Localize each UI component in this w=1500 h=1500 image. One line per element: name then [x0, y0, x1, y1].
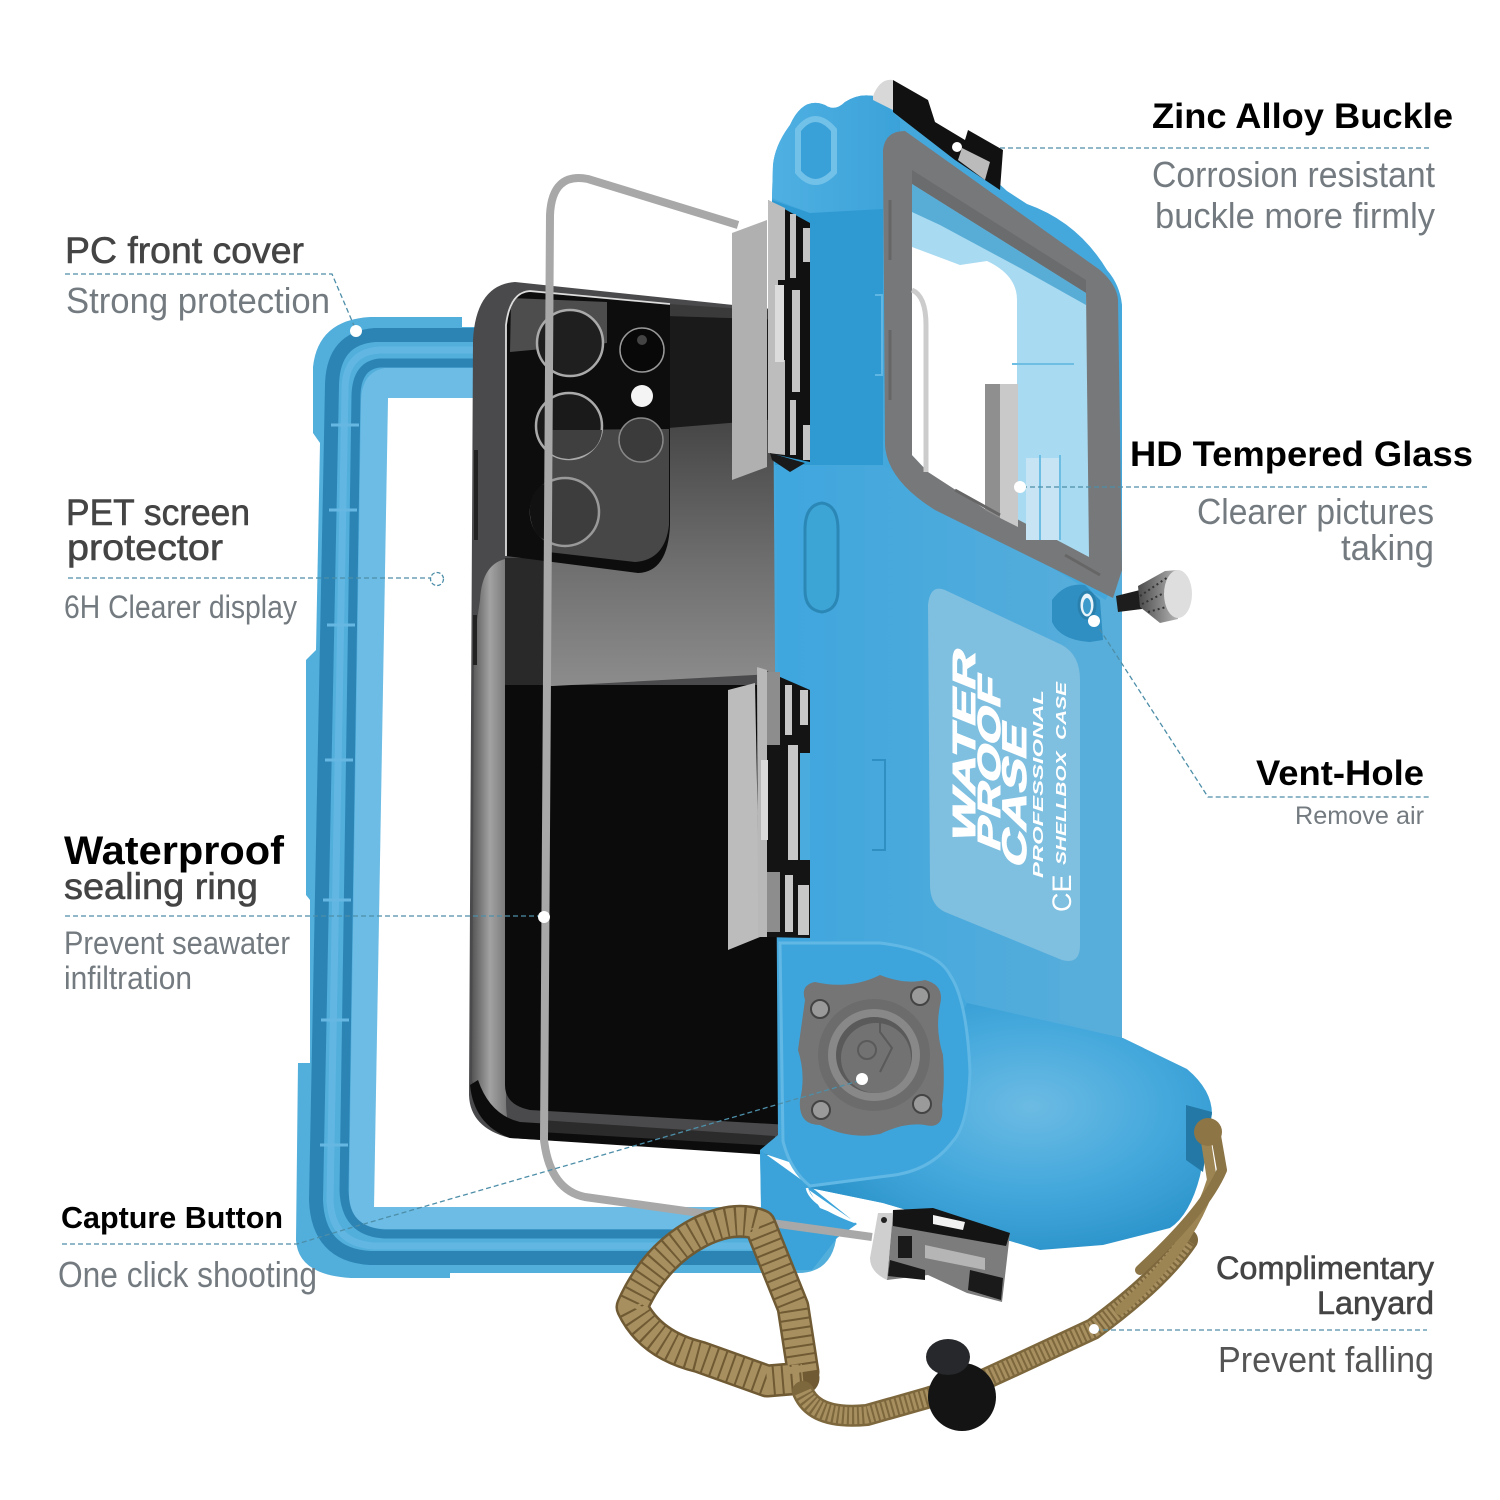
cord lock bead — [926, 1339, 996, 1431]
grip — [810, 1003, 1212, 1250]
callout: Zinc Alloy Buckle — [952, 97, 1453, 236]
callout: Zinc Alloy Buckle: Corrosion resistant — [1152, 154, 1435, 195]
callout: HD Tempered Glass: taking — [1341, 527, 1434, 568]
callout: Zinc Alloy Buckle: Zinc Alloy Buckle — [1152, 97, 1453, 136]
callout: Vent-Hole: Vent-Hole — [1256, 754, 1424, 793]
logo panel: CASE — [996, 715, 1034, 873]
zinc alloy top buckle — [873, 80, 1003, 190]
tempered glass window — [912, 184, 1089, 557]
panel: PC front cover frame — [296, 317, 836, 1278]
viewing window gasket — [883, 131, 1122, 598]
top section — [772, 95, 900, 213]
callout: PC front cover — [65, 230, 362, 337]
callout: PC front cover: PC front cover — [65, 230, 304, 271]
logo panel: PROOF — [972, 669, 1008, 856]
case body — [760, 95, 1212, 1270]
top slot — [798, 119, 834, 182]
callout: PC front cover: Strong protection — [66, 280, 330, 321]
logo panel: CE — [1047, 874, 1077, 912]
long slot — [805, 503, 838, 612]
callout: HD Tempered Glass: HD Tempered Glass — [1130, 435, 1473, 474]
callout: Complimentary Lanyard — [1089, 1250, 1434, 1380]
callout: Waterproof sealing ring: sealing ring — [64, 866, 258, 907]
vent hole with thumb screw — [1052, 570, 1192, 642]
callout: HD Tempered Glass — [1014, 435, 1473, 568]
button recess — [780, 943, 970, 1186]
waterproof sealing ring — [544, 178, 872, 1237]
callout: Waterproof sealing ring — [64, 829, 550, 996]
bottom buckle — [870, 1208, 1010, 1302]
callout: Waterproof sealing ring: Prevent seawater — [64, 925, 290, 961]
camera island — [506, 291, 670, 573]
logo panel: SHELLBOX CASE — [1053, 681, 1070, 865]
callout: Zinc Alloy Buckle: buckle more firmly — [1155, 195, 1435, 236]
callout: Capture Button — [58, 1073, 868, 1295]
callout: PET screen protector: PET screen — [66, 492, 250, 533]
callout: Capture Button: One click shooting — [58, 1254, 317, 1295]
logo panel: PROFESSIONAL — [1030, 690, 1047, 878]
phone — [469, 282, 790, 1155]
callout: Complimentary Lanyard: Complimentary — [1216, 1250, 1434, 1286]
lower hinge clip — [728, 667, 810, 950]
callout: Waterproof sealing ring: Waterproof — [64, 829, 285, 873]
callout: Capture Button: Capture Button — [61, 1200, 283, 1235]
callout: PET screen protector — [64, 492, 444, 625]
callout: Complimentary Lanyard: Prevent falling — [1218, 1339, 1434, 1380]
logo panel: WATER — [947, 642, 983, 848]
callout: Vent-Hole — [1088, 615, 1430, 830]
upper hinge clip — [732, 200, 810, 480]
callout: PET screen protector: protector — [67, 527, 223, 568]
logo panel — [928, 589, 1080, 961]
callout: Complimentary Lanyard: Lanyard — [1317, 1285, 1434, 1321]
callout: Vent-Hole: Remove air — [1295, 802, 1424, 830]
capture button — [798, 975, 944, 1136]
callout: HD Tempered Glass: Clearer pictures — [1197, 491, 1434, 532]
callout: Waterproof sealing ring: infiltration — [64, 960, 192, 996]
callout: PET screen protector: 6H Clearer display — [64, 589, 297, 625]
screen window — [374, 398, 780, 1207]
lanyard — [632, 1118, 1222, 1431]
